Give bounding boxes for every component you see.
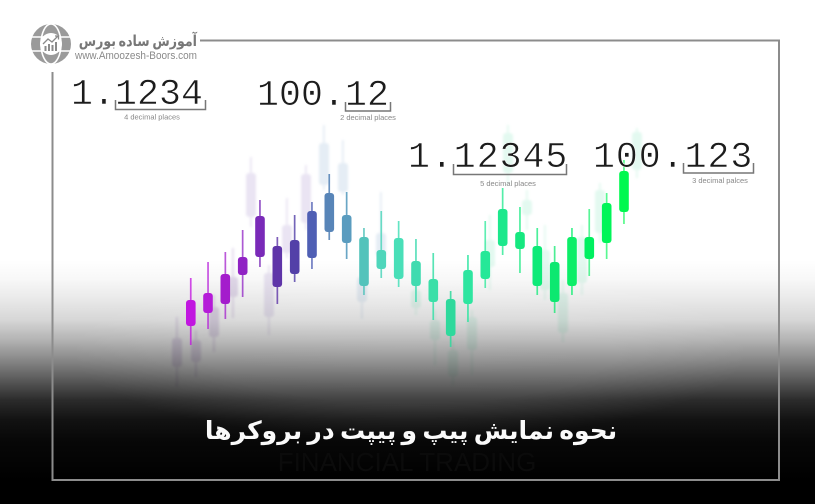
dark bottom gradient <box>0 260 815 504</box>
number: 1.12345: 1.12345 <box>408 137 568 178</box>
number: 100.12: 100.12 <box>257 75 389 116</box>
bracket: 4 decimals <box>116 100 206 110</box>
frame <box>52 40 779 480</box>
candle 17 <box>463 255 473 322</box>
candle 14 <box>411 239 421 302</box>
candle 12 <box>376 211 386 278</box>
candle 8 <box>307 202 317 269</box>
candle 3 <box>220 252 230 319</box>
label: 5 decimal places: 5 decimal places <box>480 179 536 188</box>
label: 2 decimal places: 2 decimal places <box>340 113 396 122</box>
faint caption: FINANCIAL TRADING <box>278 447 536 477</box>
candle 25 <box>602 193 612 259</box>
bracket: 3 decimals <box>684 163 754 173</box>
candle 18 <box>480 221 490 288</box>
candle 5 <box>255 200 265 267</box>
candle 11 <box>359 228 369 295</box>
central glow <box>60 255 760 445</box>
candle 13 <box>394 221 404 287</box>
candle 26 <box>619 160 629 224</box>
number: 100.123: 100.123 <box>593 137 753 178</box>
logo name: آموزش ساده بورس <box>79 32 198 50</box>
number: 1.1234: 1.1234 <box>71 74 203 115</box>
background reflection candles <box>172 125 642 387</box>
candle 15 <box>428 253 438 320</box>
candle 7 <box>290 215 300 282</box>
label: 4 decimal places: 4 decimal places <box>124 112 180 122</box>
candle 2 <box>203 262 213 329</box>
candle 19 <box>498 188 508 255</box>
candle 23 <box>567 228 577 295</box>
bracket: 5 decimals <box>454 164 566 174</box>
candle 1 <box>186 278 196 345</box>
candle 9 <box>324 174 334 240</box>
bracket: 2 decimals <box>346 102 390 111</box>
label: 3 decimal palces: 3 decimal palces <box>692 176 748 185</box>
title: نحوه نمایش پیپ و پیپت در بروکرها <box>205 416 617 446</box>
logo <box>31 24 198 64</box>
candle 21 <box>532 228 542 295</box>
candle 4 <box>238 230 248 297</box>
candle 20 <box>515 207 525 273</box>
candle 16 <box>446 291 456 347</box>
candle 22 <box>550 246 560 313</box>
candle 10 <box>342 192 352 259</box>
candlestick chart <box>186 160 629 347</box>
candle 24 <box>584 209 594 276</box>
logo url: www.Amoozesh-Boors.com <box>74 50 197 62</box>
icon: globe with chart <box>31 24 71 64</box>
candle 6 <box>272 237 282 304</box>
